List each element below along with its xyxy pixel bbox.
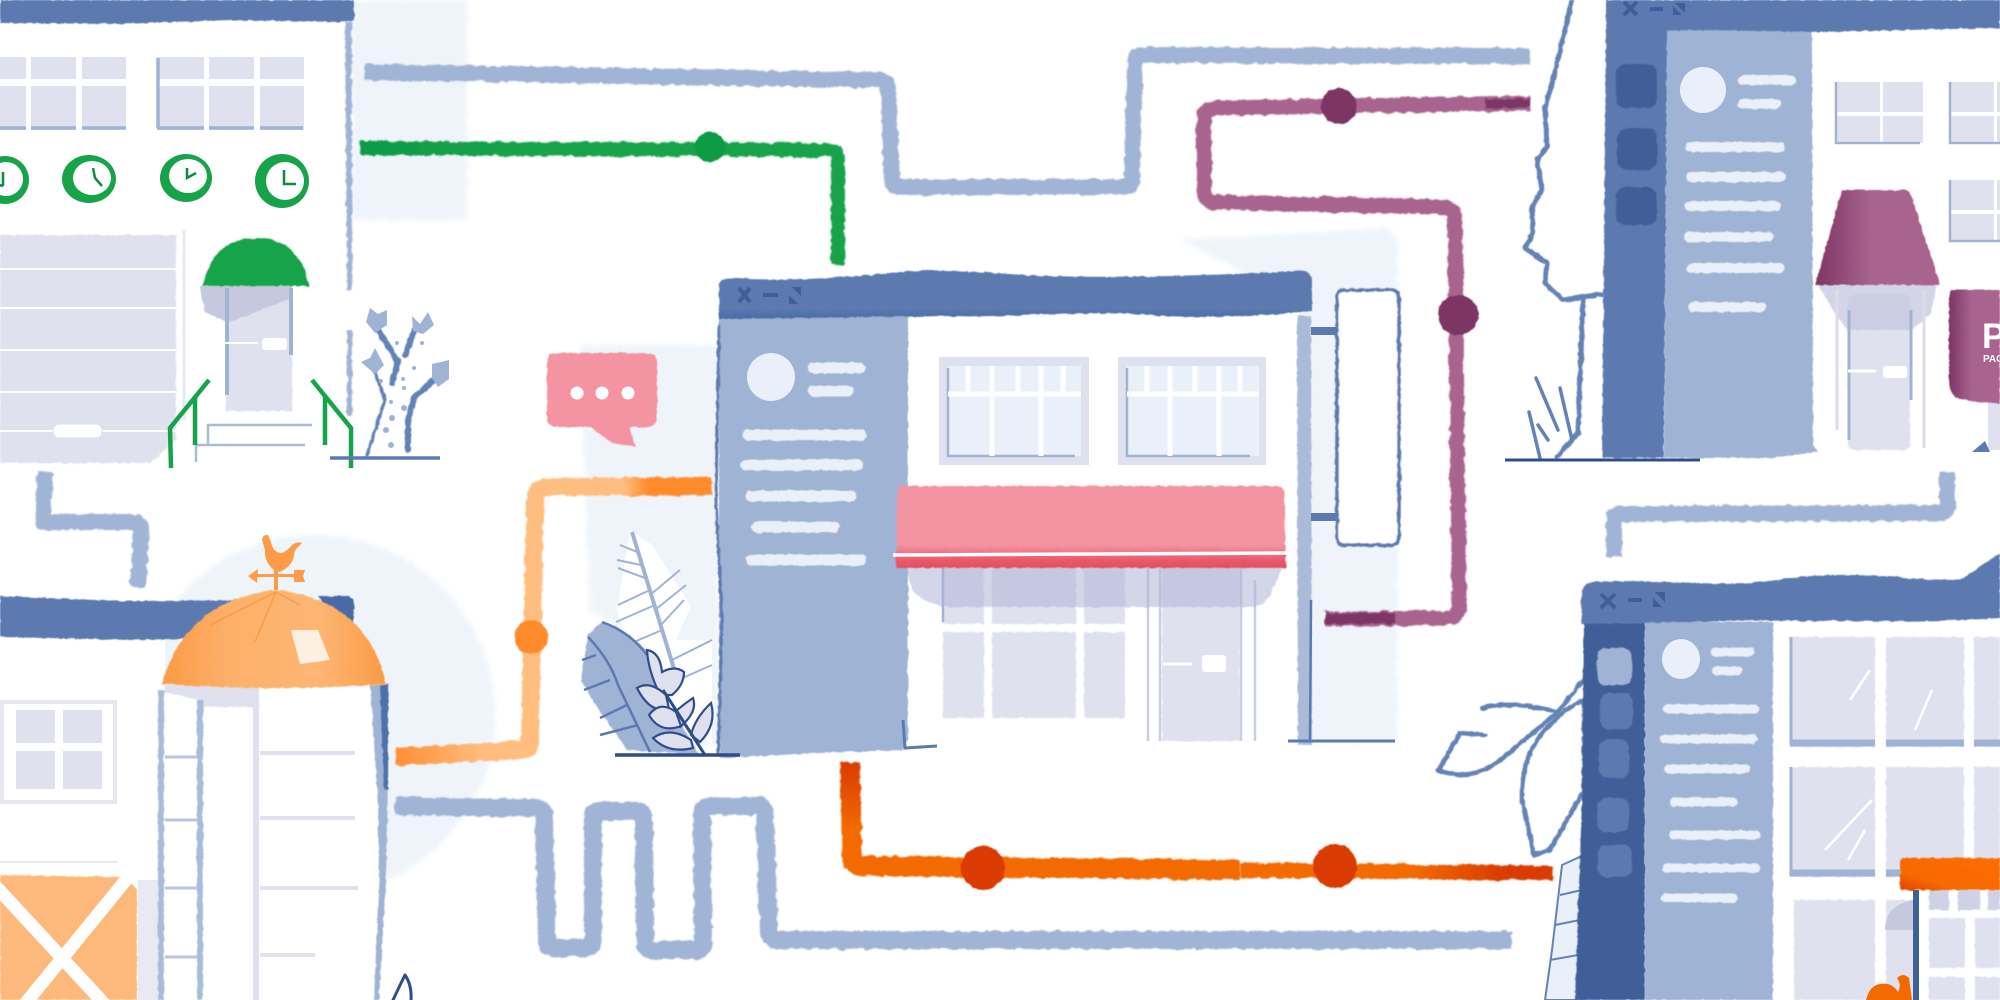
orange awning (1900, 858, 2000, 890)
connector pipe: purple with nodes (1204, 88, 1530, 619)
shop door outer frame (1837, 290, 1924, 448)
building: bottom-left barn and silo (0, 535, 388, 1000)
right shop dark sidebar (1575, 622, 1645, 1000)
connector pipe: red-orange with nodes (850, 762, 1553, 890)
sign brackets (1311, 331, 1337, 517)
connector pipe: bottom serpentine blue (395, 806, 1512, 950)
silo body (160, 685, 386, 1000)
door shadow (200, 286, 292, 322)
shop window shadows (1836, 82, 2000, 241)
awning shadow (906, 568, 1282, 607)
door handle (225, 342, 258, 344)
building: top-right shop with purple awning (1602, 0, 2000, 458)
blue leaf veins (582, 622, 650, 752)
panel avatar (747, 353, 795, 401)
glass reflections (1825, 670, 1932, 860)
barn title bar (0, 596, 300, 640)
barn side band (138, 880, 160, 1000)
palm trunk segments (1550, 890, 1582, 960)
garage door slats (0, 269, 176, 431)
ground line (1288, 740, 1395, 742)
window control icons (739, 288, 778, 302)
silo dark right edge (370, 684, 388, 1000)
right shop title bar (1581, 553, 2000, 624)
plant: tree beside top-right shop (1505, 0, 1700, 460)
palm trunk (1545, 855, 1584, 1000)
shop sidebar squares (1616, 64, 1657, 225)
shop windows (1836, 82, 2000, 241)
garage door (0, 235, 176, 463)
red-orange node right (1313, 844, 1357, 888)
tree trunk (1557, 300, 1583, 457)
barn title bar right end (318, 596, 354, 625)
upper window right (1118, 357, 1266, 465)
shop door (1848, 294, 1910, 450)
purple node top (1321, 88, 1357, 124)
shop door shadow (1818, 285, 1936, 330)
awning white stripe (893, 553, 1288, 555)
silo dome (162, 590, 386, 688)
barn door lintel (0, 861, 118, 863)
green awning (203, 238, 309, 286)
shop expand icon (1673, 3, 1685, 15)
upper window left (939, 357, 1089, 465)
icon: clocks (0, 154, 309, 208)
door handle plate (1202, 655, 1226, 672)
warehouse title bar (0, 0, 354, 24)
plant: palm beside bottom-right shop (1438, 672, 1590, 1000)
right shop avatar (1662, 639, 1700, 679)
green rails (170, 380, 351, 468)
lower windows (943, 568, 1125, 718)
shop light panel (1664, 28, 1818, 458)
right shop panes (1790, 637, 2000, 1000)
tree flowers (361, 308, 449, 387)
silo panel edge (253, 695, 259, 1000)
building: top-left warehouse (0, 0, 354, 468)
barn window panes (16, 710, 102, 789)
barn door (0, 875, 137, 1000)
barn door cross (0, 875, 130, 1000)
lavender leaflets (637, 650, 713, 750)
building: central storefront (716, 270, 1399, 758)
shop door frame (1849, 310, 1911, 440)
right shop sidebar squares (1597, 648, 1633, 877)
palm leaf left (1438, 672, 1590, 775)
door handle (1163, 662, 1192, 666)
dome patch (291, 630, 330, 664)
orange awning window (1929, 890, 2000, 1000)
shop door handle plate (1883, 366, 1907, 378)
awning post (1913, 890, 1919, 1000)
entrance door (1162, 568, 1240, 741)
icon: small tree with flowers (330, 308, 449, 458)
awning cast shadow (1885, 900, 1913, 930)
silo left and panel lines (161, 690, 200, 1000)
barn window (2, 702, 115, 802)
shop door handle (1848, 370, 1876, 372)
shop title bar (1606, 0, 2000, 32)
shop window control icons (1624, 2, 1663, 15)
right shop light panel (1645, 622, 1773, 1000)
shop text lines (1689, 80, 1791, 307)
steps (196, 425, 312, 462)
leaflet stem (663, 690, 705, 755)
ground line (1505, 458, 1700, 462)
connector pipe: right blue (1614, 472, 1947, 556)
door (226, 286, 292, 411)
purple pipe dark end (1325, 618, 1395, 619)
purple awning (1815, 190, 1940, 285)
speech bubble (547, 353, 657, 447)
warehouse right wall strip (345, 22, 352, 415)
right shop body (1773, 622, 2000, 1000)
connector pipe: top blue (365, 55, 1530, 187)
blue leaf (581, 622, 700, 755)
silo rings left (165, 757, 198, 957)
silo right shade (380, 684, 388, 790)
red-orange node left (961, 846, 1005, 890)
white leaf stem (632, 532, 675, 672)
right shop text lines (1665, 652, 1756, 898)
blade sign (1337, 290, 1399, 545)
parcel sign (1949, 290, 2000, 404)
right shop pane side edge (1790, 637, 1792, 875)
tree dots (379, 323, 424, 448)
garage handle (53, 424, 102, 438)
central right wall (1297, 316, 1312, 745)
icon: rooster weather vane (248, 535, 305, 590)
icon: navy leaf tip bottom (393, 975, 411, 1000)
white leaf veins (616, 545, 712, 680)
central title bar (719, 270, 1312, 319)
grass (1529, 378, 1572, 458)
palm leaf hanging (1522, 700, 1584, 855)
red-orange pipe right section (1240, 870, 1553, 873)
entrance door frames (1148, 568, 1255, 741)
green node (695, 132, 725, 162)
central panel left edge (716, 325, 722, 755)
post foot (1972, 441, 1990, 452)
right shop window control icons (1601, 594, 1642, 608)
tree ground (330, 456, 440, 460)
parcel sign post (1988, 400, 2000, 450)
lower window left line (942, 568, 944, 622)
shop dark sidebar (1602, 28, 1668, 458)
central right wall dark line (1310, 600, 1311, 742)
dome seams (210, 592, 300, 642)
silo rings right (260, 753, 358, 955)
tree trunk and branches (367, 325, 433, 455)
shop avatar (1680, 67, 1726, 113)
panel foot line (903, 720, 937, 748)
garage door frame line (182, 230, 186, 420)
purple node right (1438, 295, 1478, 335)
panel text lines (746, 368, 861, 560)
door handle plate (262, 338, 287, 350)
plant: leaves beside central store (581, 530, 740, 755)
right shop expand icon (1653, 592, 1665, 607)
door frame (227, 288, 291, 395)
white leaf (617, 530, 712, 745)
warehouse upper windows (0, 57, 304, 130)
central left panel (719, 316, 908, 758)
connector pipe: left small blue (43, 472, 141, 587)
silo top band (164, 685, 259, 707)
right shop pane shadows (1790, 743, 2000, 873)
warehouse window shadows (0, 58, 303, 128)
orange bush (1866, 975, 1912, 1000)
pink awning (896, 486, 1286, 568)
window expand icon (789, 287, 801, 304)
orange node (514, 620, 548, 654)
tree canopy outline (1525, 0, 1602, 300)
bubble dots (570, 386, 634, 400)
connector pipe: orange with node (395, 486, 712, 757)
background washes behind the buildings (135, 0, 1398, 895)
barn white body (0, 630, 165, 1000)
plant ground line (615, 753, 740, 757)
connector pipe: green with node (360, 132, 838, 265)
purple pipe dark end top (1485, 103, 1530, 104)
building: bottom-right shop with orange awning (1575, 553, 2000, 1000)
